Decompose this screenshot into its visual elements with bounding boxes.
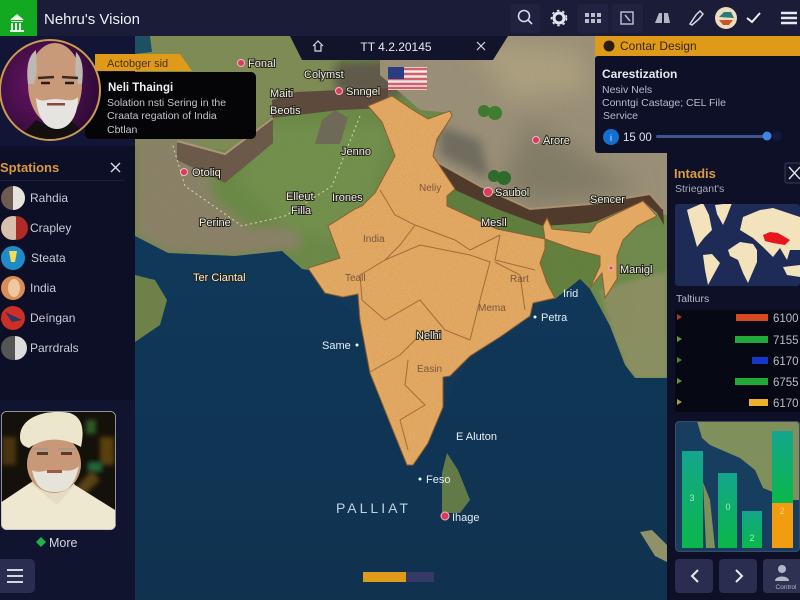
map labels: Filla [291, 205, 312, 217]
ocean [135, 236, 667, 600]
corner water [135, 36, 152, 54]
map labels: Nelhi [416, 330, 441, 342]
item: Crapley [1, 216, 71, 240]
progress bar [363, 572, 434, 582]
icon: check [747, 13, 760, 22]
callout text: Neli Thaingi [108, 82, 173, 94]
southern green strip [447, 189, 545, 239]
slider: i [610, 133, 612, 143]
item: India: India [30, 281, 56, 295]
Sri Lanka [442, 453, 470, 513]
India map: Mema [478, 303, 506, 314]
item: Steata [1, 246, 66, 270]
button: control: Control [776, 584, 797, 591]
panel text: Service [603, 110, 638, 122]
item: India [1, 276, 56, 300]
map labels: Same [322, 340, 351, 352]
map labels: Irones [332, 192, 363, 204]
bar chart: 2 [749, 533, 755, 543]
profile callout [0, 40, 256, 142]
icon: close [477, 42, 485, 50]
icon: menu [781, 13, 797, 23]
item: Deíngan: Deíngan [30, 311, 75, 325]
row: 7155: 7155 [773, 335, 799, 347]
India map: Teall [345, 273, 366, 284]
list heading: Taltiurs [676, 293, 709, 305]
icon: book [655, 13, 670, 23]
map labels: Irid [563, 288, 578, 300]
flag [388, 67, 427, 90]
map labels: Perine [199, 217, 231, 229]
route dotted line [172, 116, 360, 226]
panel: contact design [595, 36, 800, 153]
callout text [107, 58, 226, 136]
toolbar icons [510, 4, 797, 33]
panel: stations heading [0, 160, 125, 181]
station list [1, 186, 79, 360]
callout text: Cbtlan [107, 124, 138, 136]
date bar [290, 36, 508, 60]
left sidebar [0, 36, 135, 600]
map labels: Colymst [304, 69, 344, 81]
right sidebar [667, 153, 800, 600]
item: Steata: Steata [31, 251, 66, 265]
app title: Nehru's Vision [44, 11, 140, 28]
item: Parrdrals [1, 336, 79, 360]
icon: home [313, 41, 323, 51]
portrait card [0, 411, 116, 530]
panel: stations heading: Sptations [0, 160, 59, 175]
panel header: Contar Design [620, 39, 697, 53]
map labels [192, 58, 652, 524]
northern land mass [135, 36, 667, 378]
callout tag [95, 54, 192, 71]
callout text: Actobger sid [107, 58, 168, 70]
item: Deíngan [1, 306, 75, 330]
bar chart: 2 [779, 506, 785, 516]
ocean label: PALLIAT [336, 500, 411, 516]
top bar [0, 0, 800, 45]
northern fort wall [272, 88, 388, 118]
small south-east land [640, 530, 667, 562]
map pins [180, 60, 613, 520]
map labels: Ter Ciantal [193, 272, 246, 284]
India map: Easin [417, 364, 442, 375]
map labels: Petra [541, 312, 568, 324]
map labels: Elleut [286, 191, 314, 203]
button: previous [675, 559, 713, 593]
more link: More [49, 536, 78, 550]
map labels: Ihage [452, 512, 480, 524]
date bar: TT 4.2.20145 [360, 40, 432, 54]
slider: 15 00 [623, 132, 652, 144]
panel text: Nesiv Nels [602, 84, 652, 96]
map labels: E Aluton [456, 431, 497, 443]
world map [675, 203, 800, 286]
west island [135, 275, 167, 342]
more link [36, 536, 78, 550]
item: Rahdia [1, 186, 68, 210]
Himalayan wall [439, 164, 664, 226]
icon: grid [585, 13, 601, 23]
map labels: Snngel [346, 86, 380, 98]
row: 6170: 6170 [773, 356, 799, 368]
panel heading: Intadis: Striegant's [675, 183, 724, 195]
home button [0, 0, 37, 45]
map background [135, 36, 667, 600]
menu button [0, 559, 35, 593]
item: Parrdrals: Parrdrals [30, 341, 79, 355]
panel header [595, 36, 800, 56]
icon: search [518, 10, 532, 24]
panel text: Carestization [602, 67, 677, 81]
row: 6755: 6755 [773, 377, 799, 389]
callout text: Craata regation of India [107, 110, 217, 122]
panel heading: Intadis: Intadis [674, 166, 716, 181]
icon: settings [552, 10, 566, 26]
India map: Rart [510, 274, 529, 285]
temple [315, 110, 348, 144]
bar chart: 0 [725, 502, 731, 512]
map labels: Fonal [248, 58, 276, 70]
map labels: Maiti [270, 88, 293, 100]
India map: India [363, 234, 385, 245]
row: 6100: 6100 [773, 313, 799, 325]
panel: ranking rows [675, 310, 800, 412]
panel heading: Intadis [674, 163, 800, 195]
row: 6170: 6170 [773, 398, 799, 410]
icon: pen [690, 11, 703, 25]
bar chart [675, 421, 800, 552]
map labels: Otoliq [192, 167, 221, 179]
map labels: Arore [543, 135, 570, 147]
map labels: Feso [426, 474, 450, 486]
icon: avatar badge [715, 7, 737, 29]
item: Rahdia: Rahdia [30, 191, 68, 205]
India map: Neliy [419, 183, 441, 194]
callout body [85, 72, 256, 139]
panel text: Conntgi Castage; CEL File [602, 97, 726, 109]
slider [603, 129, 782, 145]
callout text: Solation nsti Sering in the [107, 97, 226, 109]
India map [308, 96, 657, 465]
bar chart: 3 [689, 493, 695, 503]
wall top edge [430, 158, 663, 209]
fortress walls [177, 118, 273, 183]
map labels: Sencer [590, 194, 625, 206]
trees [478, 105, 511, 185]
button: next [719, 559, 757, 593]
icon: document [621, 12, 633, 24]
item: Crapley: Crapley [30, 221, 71, 235]
map labels: Jenno [341, 146, 371, 158]
map labels: Manigl [620, 264, 652, 276]
map labels: Saubol [495, 187, 529, 199]
panel text [602, 67, 726, 122]
map labels: Mesll [481, 217, 507, 229]
map labels: Beotis [270, 105, 301, 117]
portrait medallion [0, 40, 100, 142]
nav buttons [675, 559, 800, 593]
